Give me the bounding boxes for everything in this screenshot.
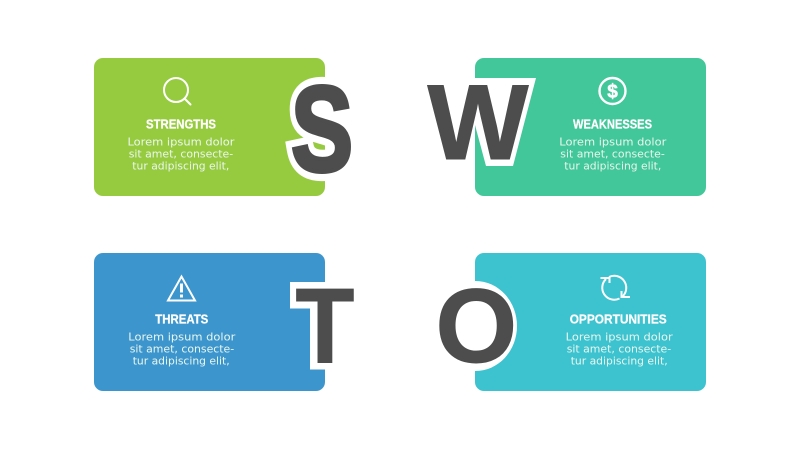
letter O: O (436, 268, 517, 385)
heading: threats: THREATS (155, 312, 208, 326)
text: opportunities body: Lorem ipsum dolor (566, 330, 673, 344)
letter S: S (291, 61, 353, 197)
letter W: W (428, 62, 528, 182)
panel: threats (94, 253, 325, 391)
panel: weaknesses (475, 58, 706, 196)
text: strengths body: Lorem ipsum dolor (128, 136, 235, 148)
text: strengths body: tur adipiscing elit, (132, 160, 229, 172)
text: threats body: Lorem ipsum dolor (128, 330, 236, 344)
text: opportunities body (566, 330, 673, 368)
text: strengths body: sit amet, consecte- (129, 148, 233, 160)
letter T: T (296, 266, 354, 386)
text: opportunities body: tur adipiscing elit, (571, 354, 668, 368)
text: threats body: sit amet, consecte- (130, 342, 234, 356)
panel: opportunities (475, 253, 706, 391)
icon: warning triangle (168, 276, 195, 300)
heading: opportunities: OPPORTUNITIES (570, 312, 667, 326)
panel: strengths (94, 58, 325, 196)
icon: dollar coin: $ (607, 82, 618, 102)
text: opportunities body: sit amet, consecte- (567, 342, 671, 356)
letter S: S (291, 61, 353, 197)
icon: refresh arrows (600, 276, 630, 300)
text: weaknesses body (559, 136, 667, 172)
text: strengths body (128, 136, 235, 172)
text: weaknesses body: Lorem ipsum dolor (559, 136, 667, 148)
text: threats body: tur adipiscing elit, (133, 354, 230, 368)
icon: magnifying glass (164, 78, 190, 104)
heading: weaknesses: WEAKNESSES (573, 118, 652, 132)
heading: strengths: STRENGTHS (146, 118, 216, 132)
text: weaknesses body: sit amet, consecte- (560, 148, 665, 160)
text: weaknesses body: tur adipiscing elit, (564, 160, 661, 172)
icon: dollar coin (600, 78, 626, 104)
text: threats body (128, 330, 236, 368)
